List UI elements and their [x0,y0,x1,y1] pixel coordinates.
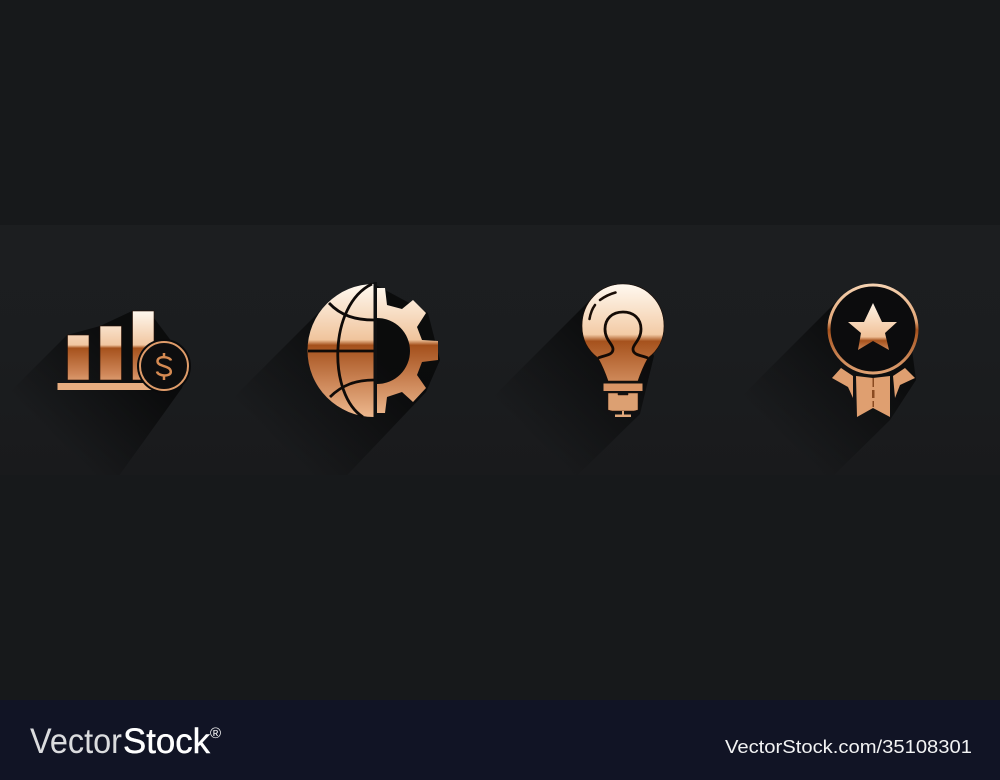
logo: Stock [123,722,210,761]
band behind icons [0,225,1000,475]
right ribbon [893,368,915,398]
bulb foot [615,411,631,417]
icon: bar chart with dollar coin [58,311,191,393]
chart base [58,383,152,390]
bulb highlight [590,292,616,319]
left ribbon [832,368,853,398]
bulb filament [598,312,648,358]
logo [30,722,221,761]
bulb screw base [608,393,638,411]
bar 1 [68,335,89,380]
bulb band [604,384,642,391]
logo: ® [210,725,221,742]
half globe [308,282,377,419]
ribbon seam [872,378,874,407]
half gear [377,288,438,413]
bulb glass [582,284,664,381]
star [848,303,897,350]
bar 2 [100,326,122,380]
dollar coin [137,339,191,393]
long shadows [46,286,916,447]
medal ring [829,285,917,373]
logo: Vector [30,722,122,761]
footer bar [0,700,1000,780]
bar 3 [132,311,154,380]
image id: VectorStock.com/35108301 [725,736,972,757]
center ribbon [856,376,890,417]
icon: half globe half gear [308,282,438,419]
icon: medal with star [829,285,917,417]
icon: light bulb [582,284,664,417]
